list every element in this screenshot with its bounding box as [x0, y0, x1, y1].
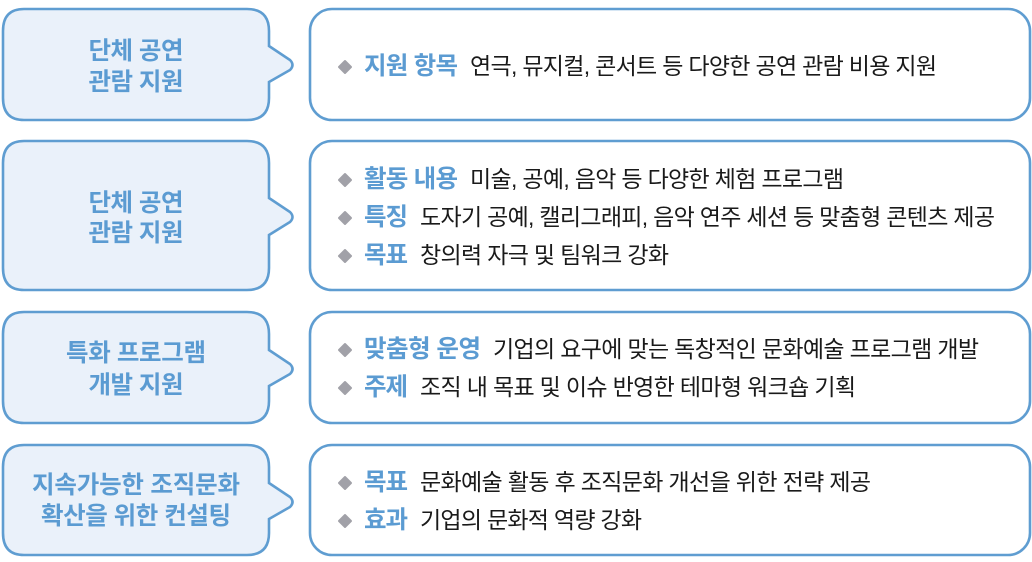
label tab: group performance viewing support: 관람 지원	[88, 68, 184, 96]
label tab: specialized program development support	[3, 312, 292, 423]
panel: activities, features, goals: 활동 내용	[364, 165, 458, 193]
label tab: group performance viewing support	[3, 141, 292, 290]
panel: activities, features, goals: 특징	[364, 203, 408, 231]
row 1	[3, 9, 1030, 120]
label tab: group performance viewing support: 단체 공연	[88, 37, 184, 65]
panel: customized operation, themes: 주제	[364, 373, 408, 401]
row 3	[3, 312, 1030, 423]
panel: activities, features, goals: 목표	[364, 242, 408, 269]
panel: activities, features, goals: 미술, 공예, 음악 등 다양한 체험 프로그램	[470, 166, 844, 192]
label tab: specialized program development support: 개발 지원	[88, 371, 184, 399]
panel: goals, effects: 효과	[364, 506, 408, 534]
panel: goals, effects: 기업의 문화적 역량 강화	[420, 507, 642, 533]
label tab: consulting to spread sustainable organizational culture: 확산을 위한 컨설팅	[41, 502, 231, 530]
panel: customized operation, themes: 기업의 요구에 맞는 독창적인 문화예술 프로그램 개발	[493, 336, 979, 362]
label tab: group performance viewing support: 관람 지원	[88, 219, 184, 247]
label tab: group performance viewing support	[3, 9, 292, 120]
panel: goals, effects	[310, 445, 1030, 555]
label tab: specialized program development support: 특화 프로그램	[66, 339, 206, 367]
row 2	[3, 141, 1030, 290]
panel: customized operation, themes	[310, 312, 1030, 423]
panel: customized operation, themes: 맞춤형 운영	[364, 335, 481, 363]
label tab: consulting to spread sustainable organizational culture: 지속가능한 조직문화	[32, 471, 240, 499]
panel: goals, effects: 문화예술 활동 후 조직문화 개선을 위한 전략 제공	[420, 469, 871, 495]
panel: customized operation, themes: 조직 내 목표 및 이슈 반영한 테마형 워크숍 기획	[420, 374, 856, 400]
panel: support items	[310, 9, 1030, 120]
panel: support items: 지원 항목	[364, 52, 458, 80]
panel: support items: 연극, 뮤지컬, 콘서트 등 다양한 공연 관람 비용 지원	[470, 53, 937, 79]
label tab: consulting to spread sustainable organizational culture	[3, 445, 292, 555]
panel: goals, effects: 목표	[364, 469, 408, 496]
panel: activities, features, goals: 창의력 자극 및 팀워크 강화	[420, 242, 669, 268]
panel: activities, features, goals: 도자기 공예, 캘리그래피, 음악 연주 세션 등 맞춤형 콘텐츠 제공	[420, 204, 995, 230]
panel: activities, features, goals	[310, 141, 1030, 290]
label tab: group performance viewing support: 단체 공연	[88, 189, 184, 217]
row 4	[3, 445, 1030, 555]
